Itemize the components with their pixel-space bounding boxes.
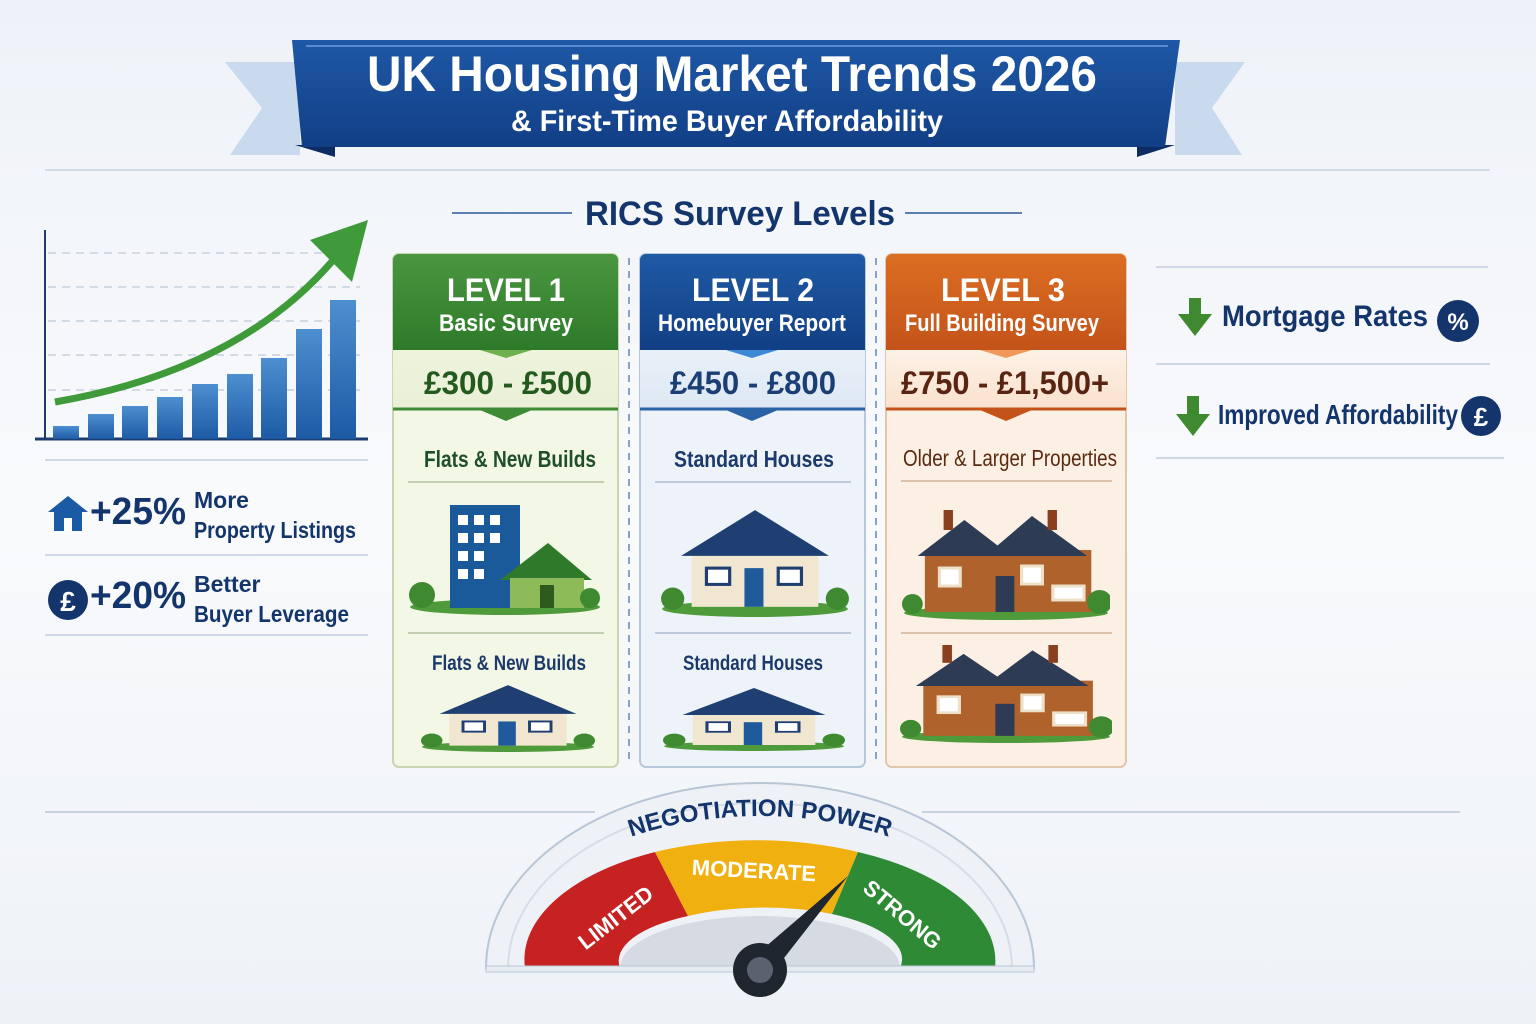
gauge: negotiation power: STRONG	[858, 875, 946, 954]
icon: flats and house	[409, 505, 600, 615]
stat: +25% listings: Property Listings	[194, 517, 356, 543]
title banner: & First-Time Buyer Affordability	[511, 105, 943, 138]
right panel: mortgage rates: %	[1447, 309, 1469, 336]
card: level 3: £750 - £1,500+	[901, 365, 1109, 401]
stat: +25% listings	[48, 487, 356, 543]
card: level 1: LEVEL 1	[447, 272, 565, 308]
gauge: negotiation power	[485, 782, 1035, 997]
stat: +20% leverage: £	[60, 586, 76, 617]
stat: +20% leverage: Buyer Leverage	[194, 601, 349, 627]
card: level 2	[640, 254, 865, 767]
card: level 3: Full Building Survey	[905, 310, 1100, 337]
right panel: improved affordability: Improved Affordability	[1218, 399, 1458, 430]
card: level 1: Flats & New Builds	[424, 446, 596, 472]
icon: standard house	[661, 510, 849, 617]
card: level 3	[886, 254, 1126, 767]
gauge needle	[733, 876, 848, 997]
card: level 2: Standard Houses	[683, 652, 823, 675]
right panel: improved affordability	[1156, 396, 1504, 458]
stat: +25% listings: +25%	[90, 491, 186, 533]
gauge: negotiation power: MODERATE	[691, 855, 817, 886]
stat: +25% listings: More	[194, 487, 249, 513]
card: level 2: £450 - £800	[670, 365, 836, 401]
section heading: RICS Survey Levels	[585, 195, 895, 233]
card: level 3: Older & Larger Properties	[903, 445, 1117, 471]
title banner: UK Housing Market Trends 2026	[367, 46, 1097, 102]
icon: new build house	[421, 685, 595, 752]
card: level 1: £300 - £500	[424, 365, 592, 401]
card: level 2: Homebuyer Report	[658, 310, 846, 337]
gauge: negotiation power: LIMITED	[573, 881, 658, 955]
card: level 2: LEVEL 2	[692, 272, 814, 308]
stat: +20% leverage: +20%	[90, 575, 186, 617]
gauge: negotiation power: NEGOTIATION POWER	[628, 799, 892, 837]
right panel: mortgage rates	[1156, 267, 1490, 364]
stat: +20% leverage: Better	[194, 571, 261, 597]
bar chart with growth arrow	[35, 220, 368, 440]
icon: semi-detached houses	[900, 645, 1114, 743]
card: level 1	[393, 254, 618, 767]
right panel: improved affordability: £	[1474, 402, 1489, 432]
card: level 1: Flats & New Builds	[432, 652, 586, 675]
icon: large detached house	[902, 510, 1112, 620]
icon: bungalow	[663, 688, 845, 751]
card: level 3: LEVEL 3	[941, 272, 1065, 308]
stat: +20% leverage	[48, 571, 349, 627]
card: level 1: Basic Survey	[439, 310, 574, 337]
card: level 2: Standard Houses	[674, 446, 834, 472]
right panel: mortgage rates: Mortgage Rates	[1222, 300, 1428, 333]
title banner	[225, 40, 1245, 157]
